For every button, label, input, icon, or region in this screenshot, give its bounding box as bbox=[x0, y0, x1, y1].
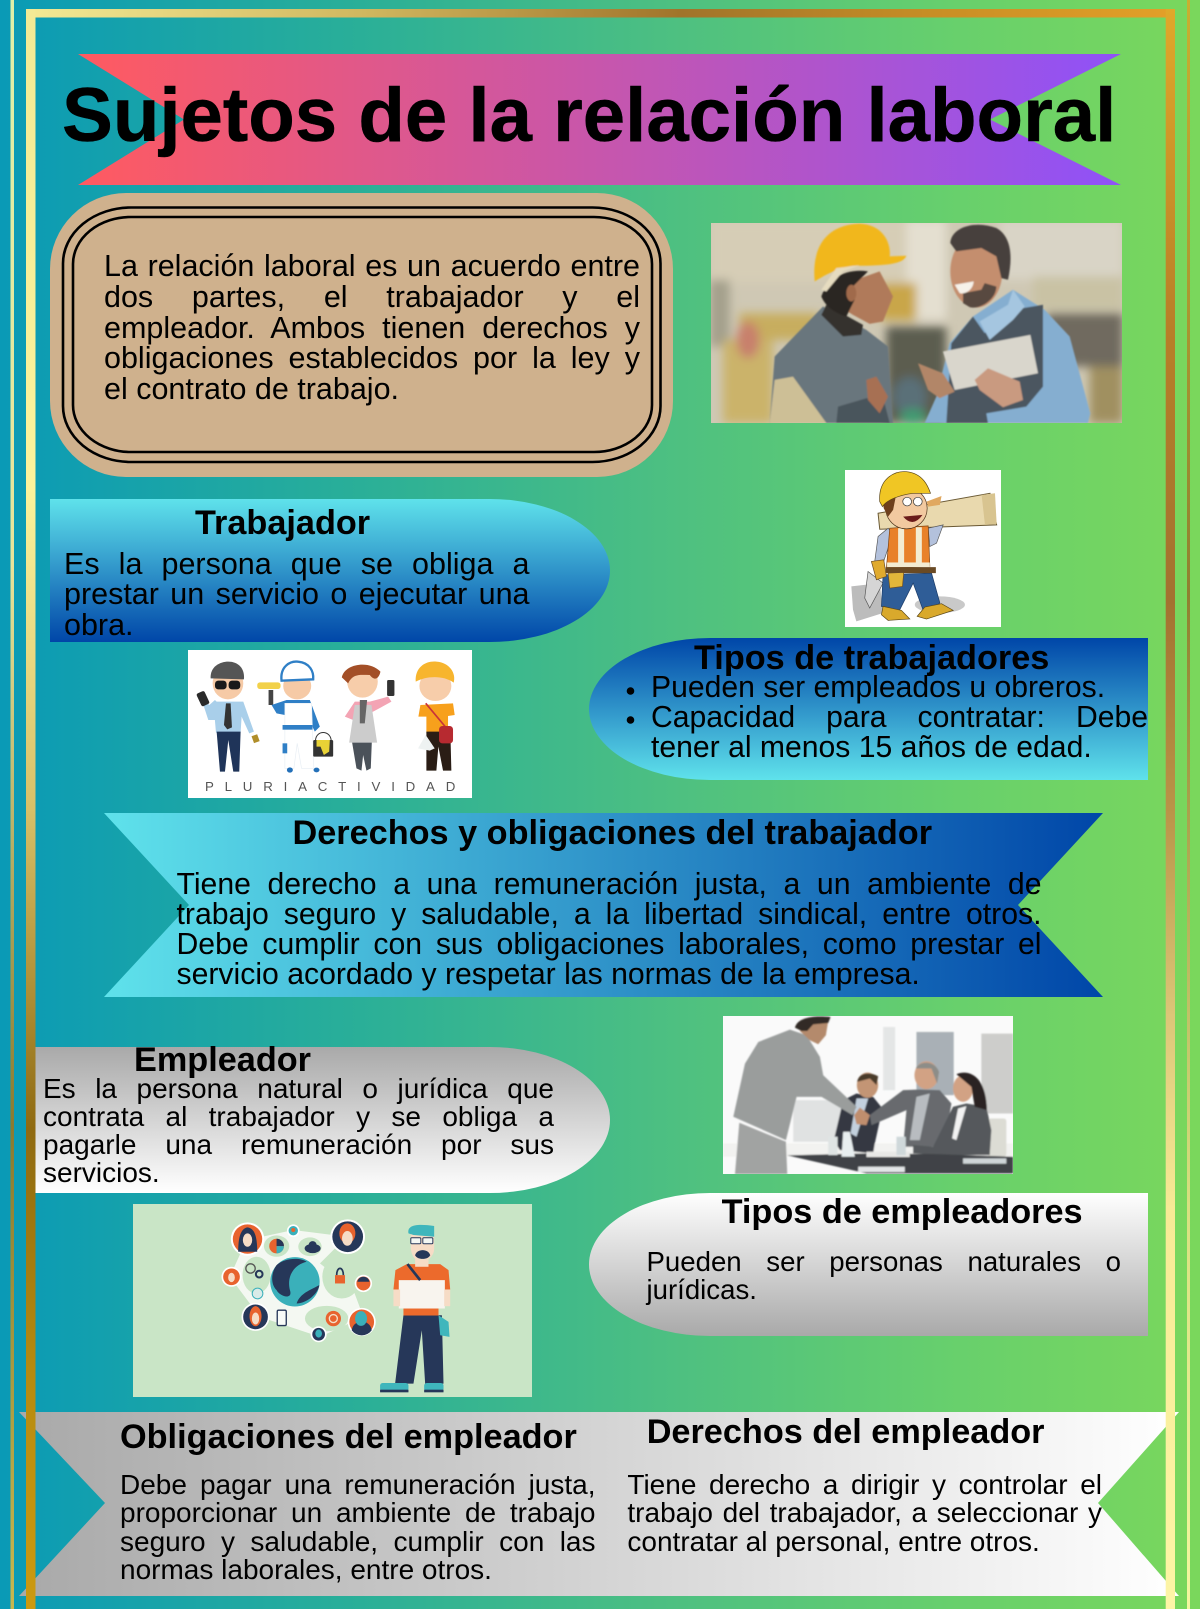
title: Sujetos de la relación laboral bbox=[62, 73, 1116, 158]
text: obligaciones del empleador: proporcionar un ambiente de trabajo bbox=[120, 1497, 596, 1528]
text: derechos y obligaciones: trabajo seguro y saludable, a la libertad sindical, entre otros. bbox=[176, 898, 1042, 930]
man bbox=[395, 1315, 444, 1384]
right man bbox=[925, 290, 1090, 423]
painter bbox=[257, 662, 333, 773]
intro text: dos partes, el trabajador y el bbox=[104, 280, 640, 314]
text: derechos y obligaciones: Tiene derecho a una remuneración justa, a un ambiente de bbox=[176, 868, 1042, 900]
heading: tipos de empleadores: Tipos de empleadores bbox=[722, 1193, 1083, 1231]
illustration: man with global network bbox=[133, 1204, 532, 1397]
text: obligaciones del empleador bbox=[120, 1469, 596, 1585]
heading: trabajador: Trabajador bbox=[195, 504, 370, 542]
text: derechos y obligaciones: servicio acordado y respetar las normas de la empresa. bbox=[176, 958, 920, 990]
text: obligaciones del empleador: normas laborales, entre otros. bbox=[120, 1554, 492, 1585]
text: derechos del empleador bbox=[627, 1469, 1102, 1557]
text: derechos y obligaciones bbox=[176, 868, 1042, 990]
text: derechos del empleador: contratar al personal, entre otros. bbox=[627, 1526, 1040, 1557]
third worker bbox=[342, 665, 394, 771]
pluriactividad caption: PLURIACTIVIDAD bbox=[205, 779, 455, 794]
delivery worker bbox=[416, 662, 455, 771]
text: tipos de empleadores: jurídicas. bbox=[646, 1274, 757, 1305]
panel: tipos de trabajadores bbox=[589, 638, 1148, 780]
text: empleador definition: servicios. bbox=[43, 1157, 160, 1188]
heading: empleador: Empleador bbox=[134, 1041, 311, 1079]
gray-haired man bbox=[870, 1090, 951, 1147]
photo: business handshake bbox=[723, 1016, 1013, 1174]
panel: trabajador bbox=[50, 499, 610, 642]
text: empleador definition bbox=[43, 1072, 554, 1188]
text: trabajador definition: obra. bbox=[64, 608, 134, 642]
heading: obligaciones del empleador: Obligaciones del empleador bbox=[120, 1418, 577, 1456]
text: empleador definition: pagarle una remuneración por sus bbox=[43, 1129, 554, 1160]
standing man bbox=[733, 1030, 857, 1140]
list: tipos de trabajadores: tener al menos 15 años de edad. bbox=[651, 731, 1092, 764]
text: obligaciones del empleador: Debe pagar una remuneración justa, bbox=[120, 1469, 596, 1500]
heading: derechos y obligaciones: Derechos y obligaciones del trabajador bbox=[292, 814, 932, 852]
text: derechos y obligaciones: Debe cumplir con sus obligaciones laborales, como prestar el bbox=[176, 928, 1042, 960]
text: obligaciones del empleador: seguro y saludable, cumplir con las bbox=[120, 1526, 596, 1557]
illustration: cartoon construction worker bbox=[845, 470, 1001, 627]
text: empleador definition: contrata al trabajador y se obliga a bbox=[43, 1101, 554, 1132]
panel: derechos y obligaciones del trabajador bbox=[104, 813, 1103, 997]
list: tipos de trabajadores: Capacidad para contratar: Debe bbox=[651, 701, 1148, 734]
left man bbox=[770, 306, 893, 423]
intro text: La relación laboral es un acuerdo entre bbox=[104, 249, 640, 283]
heading: tipos de trabajadores: Tipos de trabajadores bbox=[694, 639, 1049, 677]
text: empleador definition: Es la persona natural o jurídica que bbox=[43, 1072, 554, 1104]
table bbox=[787, 1153, 1013, 1173]
heading: derechos del empleador: Derechos del empleador bbox=[647, 1413, 1045, 1451]
guard bbox=[196, 662, 260, 772]
seated man bbox=[834, 1094, 882, 1153]
text: tipos de empleadores bbox=[646, 1246, 1121, 1305]
text: tipos de empleadores: Pueden ser personas naturales o bbox=[646, 1246, 1121, 1277]
text: derechos del empleador: Tiene derecho a dirigir y controlar el bbox=[627, 1469, 1102, 1500]
panel: empleador bbox=[36, 1041, 610, 1193]
panel: obligaciones y derechos del empleador bbox=[19, 1412, 1179, 1596]
text: trabajador definition: prestar un servicio o ejecutar una bbox=[64, 577, 530, 611]
intro text: el contrato de trabajo. bbox=[104, 372, 399, 406]
panel: introduction bbox=[50, 193, 673, 477]
text: trabajador definition bbox=[64, 547, 530, 642]
list: tipos de trabajadores: Pueden ser empleados u obreros. bbox=[651, 671, 1105, 704]
intro text: obligaciones establecidos por la ley y bbox=[104, 341, 640, 375]
intro text bbox=[104, 249, 640, 406]
panel: tipos de empleadores bbox=[589, 1193, 1148, 1336]
photo: two workers talking bbox=[711, 223, 1122, 423]
text: derechos del empleador: trabajo del trabajador, a seleccionar y bbox=[627, 1497, 1102, 1528]
title banner bbox=[62, 54, 1121, 185]
intro text: empleador. Ambos tienen derechos y bbox=[104, 311, 640, 345]
woman bbox=[913, 1103, 991, 1155]
network blobs bbox=[230, 1230, 363, 1337]
list: tipos de trabajadores bbox=[651, 671, 1148, 764]
text: trabajador definition: Es la persona que se obliga a bbox=[64, 547, 530, 581]
illustration: pluriactividad workers bbox=[188, 650, 472, 798]
